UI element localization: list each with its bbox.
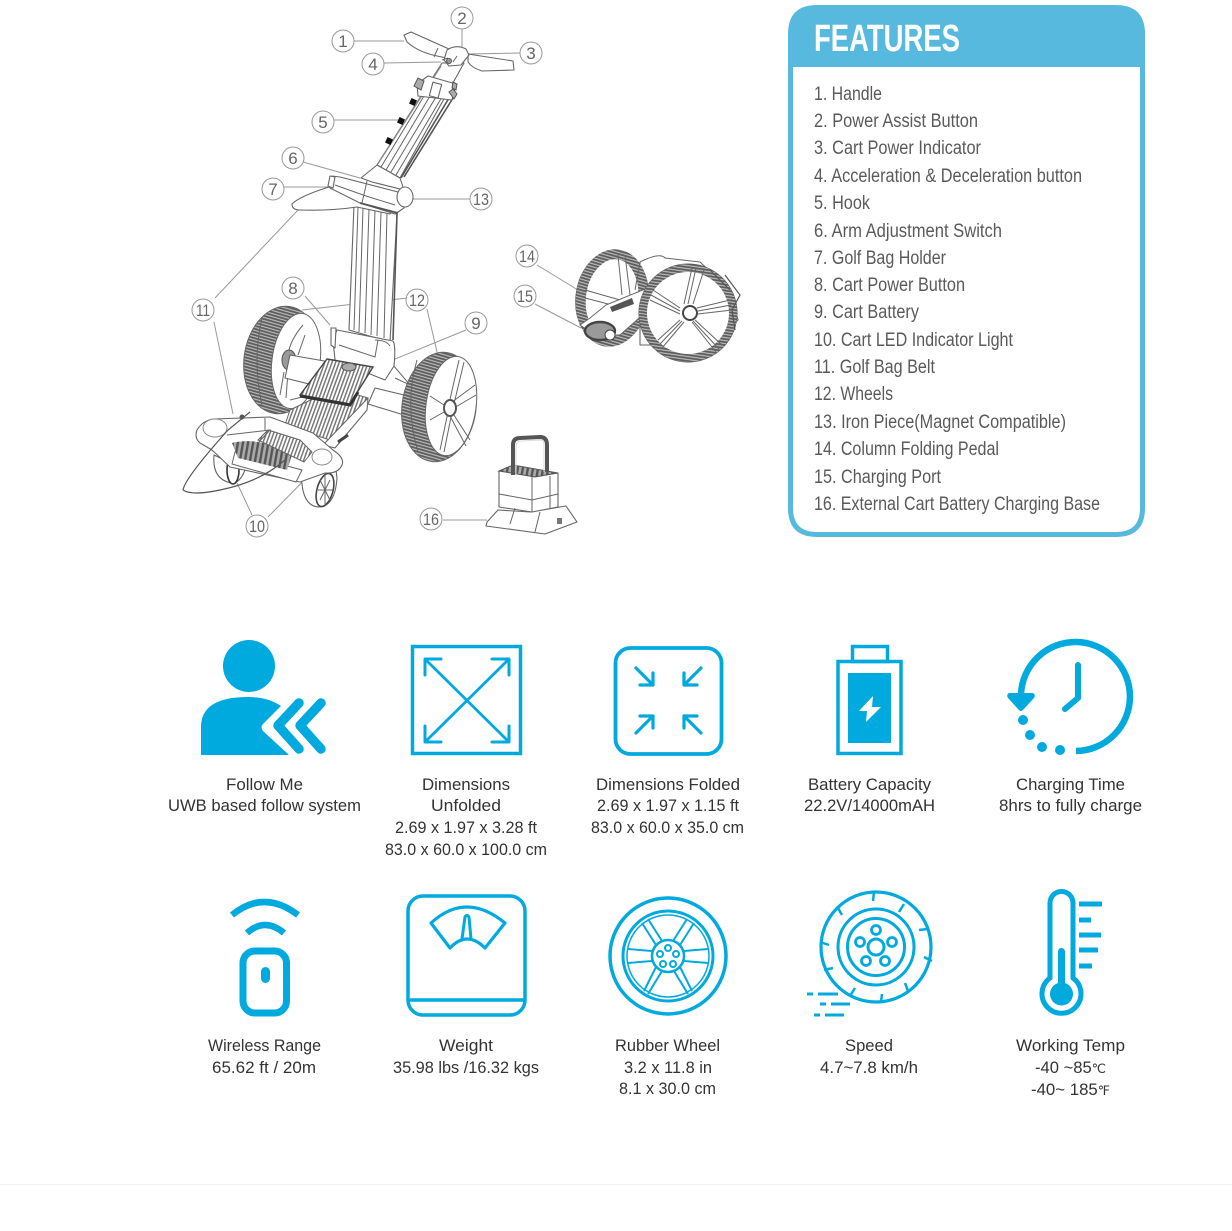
text: wireless range: Wireless Range [208,1036,321,1055]
text: follow me [168,775,361,815]
feature list: 16. External Cart Battery Charging Base [814,494,1100,515]
cart lower column [349,205,397,342]
text: charging time: Charging Time [1016,775,1125,794]
text: battery capacity [804,775,935,815]
text: weight: Weight [439,1036,493,1055]
callout 1 [332,30,354,52]
text: dimensions unfolded: 83.0 x 60.0 x 100.0 cm [385,840,547,859]
text: follow me: UWB based follow system [168,796,361,815]
icon: charging time clock [1007,642,1130,755]
callout 9 [465,312,487,334]
text: working temp [1016,1036,1125,1099]
front bumper [183,412,343,493]
text: working temp: Working Temp [1016,1036,1125,1055]
feature list: 5. Hook [814,193,870,214]
callout 8 [282,277,304,299]
text: dimensions folded: 83.0 x 60.0 x 35.0 cm [591,818,744,837]
text: follow me: Follow Me [226,775,303,794]
text: speed: 4.7~7.8 km/h [820,1058,918,1077]
text: dimensions folded: 2.69 x 1.97 x 1.15 ft [597,796,739,815]
icon: wireless range [232,902,298,1013]
text: rubber wheel: Rubber Wheel [615,1036,720,1055]
folded cart [570,245,740,362]
feature list: 1. Handle [814,84,882,105]
callout 7: 7 [268,180,278,199]
icon: dimensions unfolded [412,646,520,754]
icon: battery [838,646,901,754]
feature list: 3. Cart Power Indicator [814,138,982,159]
feature list: 11. Golf Bag Belt [814,357,936,378]
feature list: 14. Column Folding Pedal [814,439,999,460]
text: dimensions unfolded [385,775,547,859]
text: working temp: -40 ~85℃ [1035,1058,1106,1077]
callout 5 [312,111,334,133]
text: charging time [999,775,1142,815]
text: speed [820,1036,918,1077]
text: rubber wheel [615,1036,720,1098]
charging base [486,437,577,534]
axle [285,355,410,415]
cart upper column [361,32,514,190]
lower deck [285,388,368,448]
text: wireless range [208,1036,321,1077]
icon: weight scale [408,896,525,1015]
callout 2 [451,7,473,29]
icon: thermometer [1042,892,1102,1013]
right wheel [395,347,483,467]
front casters [214,455,337,508]
icon: dimensions folded [616,648,722,754]
callout 3 [520,42,542,64]
icon: rubber wheel [610,898,726,1014]
callout 6 [282,147,304,169]
handle [404,32,514,71]
feature list: 8. Cart Power Button [814,275,965,296]
icon: speed wheel [807,892,932,1015]
golf bag holder with belt [292,176,413,214]
callout 9: 9 [471,314,481,333]
text: dimensions folded: Dimensions Folded [596,775,740,794]
heading: features: FEATURES [814,18,960,60]
callout 16: 16 [423,510,439,529]
callout 12: 12 [409,291,425,310]
text: battery capacity: 22.2V/14000mAH [804,796,935,815]
left wheel [237,301,327,419]
callout 1: 1 [338,32,348,51]
callout 11: 11 [196,301,210,320]
feature list: 10. Cart LED Indicator Light [814,330,1014,351]
text: charging time: 8hrs to fully charge [999,796,1142,815]
feature list: 2. Power Assist Button [814,111,978,132]
diagram: golf cart with numbered parts [183,7,740,537]
callout 6: 6 [288,149,298,168]
callout 5: 5 [318,113,328,132]
text: dimensions folded [591,775,744,837]
text: wireless range: 65.62 ft / 20m [212,1058,316,1077]
text: speed: Speed [845,1036,893,1055]
foot platform [300,359,373,405]
text: battery capacity: Battery Capacity [808,775,931,794]
callout 7 [262,178,284,200]
callout 15: 15 [517,287,533,306]
text: rubber wheel: 3.2 x 11.8 in [624,1058,712,1077]
text: weight [393,1036,539,1077]
text: dimensions unfolded: 2.69 x 1.97 x 3.28 ft [395,818,537,837]
hook markers [385,98,417,145]
feature list: 6. Arm Adjustment Switch [814,221,1002,242]
feature list: 4. Acceleration & Deceleration button [814,166,1082,187]
callout 4 [362,53,384,75]
text: dimensions unfolded: Dimensions [422,775,510,794]
callout 2: 2 [457,9,467,28]
feature list: 12. Wheels [814,384,893,405]
feature list [814,84,1100,515]
text: rubber wheel: 8.1 x 30.0 cm [619,1079,716,1098]
text: working temp: -40~ 185℉ [1031,1080,1110,1099]
callout 3: 3 [526,44,536,63]
feature list: 13. Iron Piece(Magnet Compatible) [814,412,1066,433]
leader lines [214,29,581,520]
callout 11 [192,299,214,321]
feature list: 15. Charging Port [814,467,942,488]
callout 14: 14 [519,247,535,266]
panel: features [788,5,1145,537]
callout 13: 13 [473,190,489,209]
feature list: 9. Cart Battery [814,302,919,323]
callout 4: 4 [368,55,378,74]
text: dimensions unfolded: Unfolded [431,796,501,815]
callout 10: 10 [249,517,265,536]
callout 8: 8 [288,279,298,298]
text: weight: 35.98 lbs /16.32 kgs [393,1058,539,1077]
cart battery [331,328,395,380]
icon: follow me [201,640,321,755]
feature list: 7. Golf Bag Holder [814,248,947,269]
